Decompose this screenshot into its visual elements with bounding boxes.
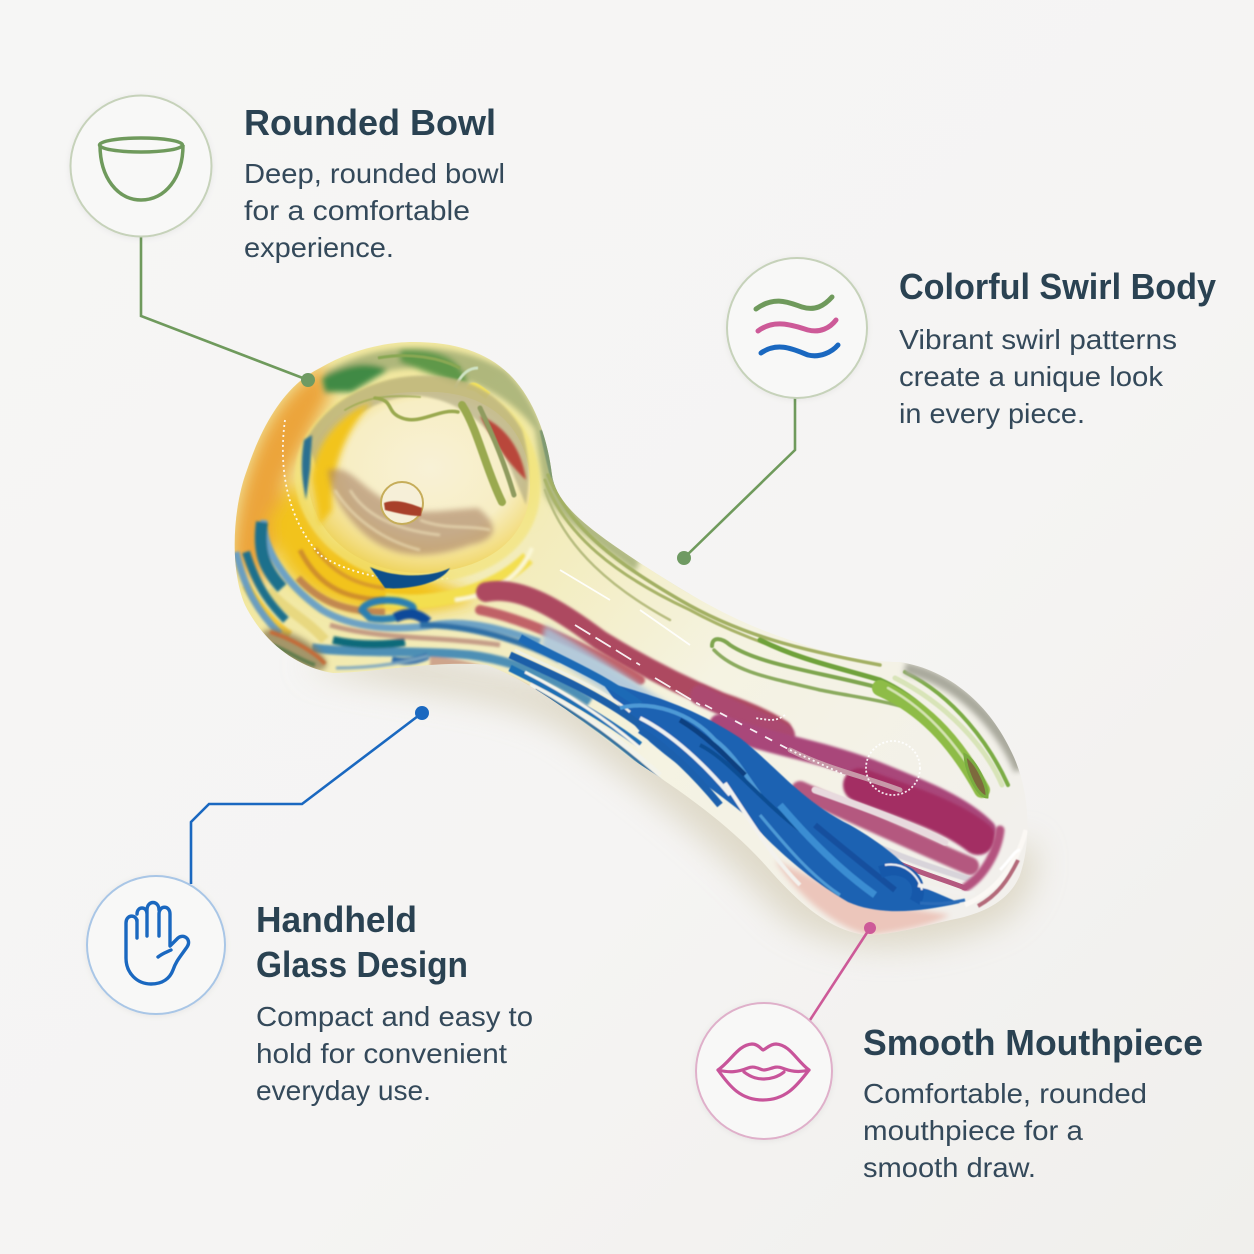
bowl swirl bands [246, 548, 532, 640]
icon: bowl [70, 96, 212, 236]
green strands in cup [345, 396, 514, 502]
brown swirl inside bowl [328, 469, 493, 555]
panel: smooth mouthpiece [696, 1003, 1203, 1183]
heading: Colorful Swirl Body [899, 266, 1216, 307]
left inner blue [302, 435, 312, 500]
text block: for a comfortable [244, 195, 470, 226]
bowl warm colouring [232, 365, 545, 613]
heading: Glass Design [256, 944, 468, 985]
blue neck streams [510, 638, 975, 911]
text block: everyday use. [256, 1075, 431, 1106]
panel: rounded bowl [70, 96, 505, 263]
green bowl top strands [378, 356, 556, 490]
leader: rounded bowl [141, 236, 315, 387]
leader: handheld [191, 706, 429, 884]
red swirl inside bowl [480, 416, 526, 480]
mouth grey edge [905, 668, 1020, 770]
pale blue glass between stripes [540, 624, 670, 702]
bowl rim [295, 377, 540, 583]
pipe shadow [300, 650, 1036, 948]
text block: Comfortable, rounded [863, 1078, 1147, 1109]
text block: hold for convenient [256, 1038, 507, 1069]
blue crescent under cup [370, 567, 450, 588]
leader: swirl body [677, 398, 795, 565]
heading [256, 899, 468, 985]
text block: Compact and easy to [256, 1001, 533, 1032]
text block: Vibrant swirl patterns [899, 324, 1177, 355]
brown texture strokes [335, 490, 490, 550]
leader: mouthpiece [810, 922, 876, 1020]
end nub of bowl [261, 626, 330, 672]
text block: smooth draw. [863, 1152, 1036, 1183]
bowl cup [302, 376, 530, 588]
heading: Handheld [256, 899, 417, 940]
text block: mouthpiece for a [863, 1115, 1083, 1146]
text block [899, 324, 1177, 429]
drain hole [381, 482, 423, 524]
cup upper dark rim [306, 376, 529, 505]
text block [256, 1001, 533, 1106]
text block: experience. [244, 232, 394, 263]
panel: colorful swirl body [727, 258, 1216, 429]
glass pipe photo illustration [70, 96, 1216, 1183]
yellow cup wall [312, 402, 372, 525]
green neck and mouth stripes [545, 475, 1008, 795]
icon: swirl waves [727, 258, 867, 398]
text block [863, 1078, 1147, 1183]
bowl green top [322, 348, 640, 572]
heading: Rounded Bowl [244, 102, 496, 143]
crimson neck stripes [480, 591, 1000, 888]
icon: hand [87, 876, 225, 1014]
panel: handheld glass design [87, 876, 533, 1106]
white neck highlights [283, 420, 920, 795]
pipe body base [235, 342, 1028, 935]
text block [244, 158, 505, 263]
text block: create a unique look [899, 361, 1164, 392]
mouth end fold [965, 830, 1026, 906]
heading: Smooth Mouthpiece [863, 1022, 1203, 1063]
blue and teal left streams [236, 520, 590, 710]
icon: lips [696, 1003, 832, 1139]
text block: Deep, rounded bowl [244, 158, 505, 189]
mouthpiece pink glow [775, 860, 950, 935]
green stripe slot [965, 755, 987, 797]
text block: in every piece. [899, 398, 1085, 429]
